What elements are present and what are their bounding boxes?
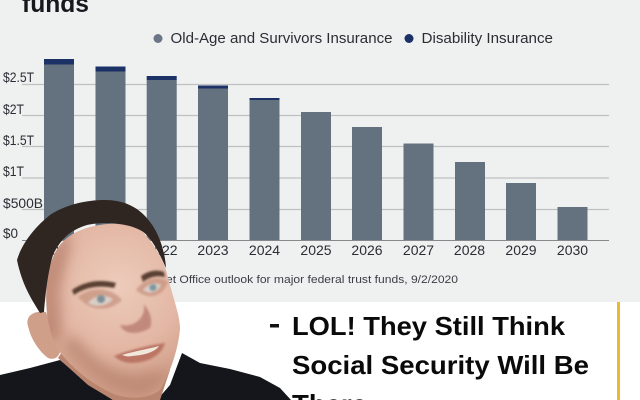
- legend: [154, 30, 553, 47]
- panel: chart background: [0, 0, 640, 302]
- bar chart: [44, 59, 588, 240]
- accent line: [617, 302, 620, 400]
- x-axis labels: [43, 242, 588, 258]
- ear: [27, 312, 60, 359]
- eyebrow left: [72, 281, 116, 295]
- quote text: [270, 311, 589, 400]
- iris left: [97, 295, 105, 303]
- bars: old-age and survivors: [44, 64, 588, 240]
- smile: [114, 343, 165, 363]
- x-axis labels: 2030: [557, 242, 588, 258]
- y-axis labels: $0: [3, 225, 18, 241]
- y-axis labels: [3, 69, 43, 241]
- eyebrow right: [141, 271, 165, 282]
- face shading: [40, 235, 170, 395]
- portrait: smiling man: [0, 200, 291, 400]
- x-axis labels: 2026: [351, 242, 383, 258]
- eye left: [88, 296, 113, 306]
- face: [46, 224, 180, 398]
- x-axis labels: 2028: [454, 242, 485, 258]
- y-axis labels: $2.5T: [3, 69, 34, 85]
- nose shadow: [120, 304, 151, 333]
- quote text: LOL! They Still Think: [292, 311, 566, 341]
- teeth: [122, 346, 159, 356]
- y-axis labels: $1T: [3, 163, 24, 179]
- x-axis labels: 2025: [300, 242, 332, 258]
- shirt: [0, 353, 291, 400]
- jaw shadow: [62, 335, 170, 395]
- bars: disability: [44, 59, 280, 100]
- iris right: [150, 284, 156, 291]
- right eye socket shadow: [136, 278, 168, 296]
- neck: [58, 340, 170, 400]
- y-axis labels: $500B: [3, 195, 43, 211]
- quote dash: [270, 324, 279, 328]
- temple shadow: [40, 235, 72, 340]
- x-axis labels: 2024: [249, 242, 280, 258]
- source caption: [26, 274, 458, 286]
- legend: disability: Disability Insurance: [422, 30, 553, 47]
- eye right: [143, 284, 161, 292]
- x-axis labels: 2027: [403, 242, 434, 258]
- x-axis labels: 2029: [505, 242, 537, 258]
- legend: old-age and survivors: Old-Age and Survivors Insurance: [170, 30, 392, 47]
- source caption: Source: Congressional Budg: [26, 274, 166, 286]
- x-axis labels: 2021: [95, 242, 126, 258]
- eye socket shadow: [78, 289, 122, 309]
- y-axis labels: $1.5T: [3, 132, 34, 148]
- hair: [17, 200, 166, 313]
- source caption: et Office outlook for major federal trust funds, 9/2/2020: [166, 274, 458, 286]
- y-axis labels: $2T: [3, 101, 24, 117]
- x-axis labels: 2022: [146, 242, 178, 258]
- quote text: Social Security Will Be: [292, 350, 589, 380]
- x-axis labels: 2020: [43, 242, 75, 258]
- x-axis labels: 2023: [197, 242, 229, 258]
